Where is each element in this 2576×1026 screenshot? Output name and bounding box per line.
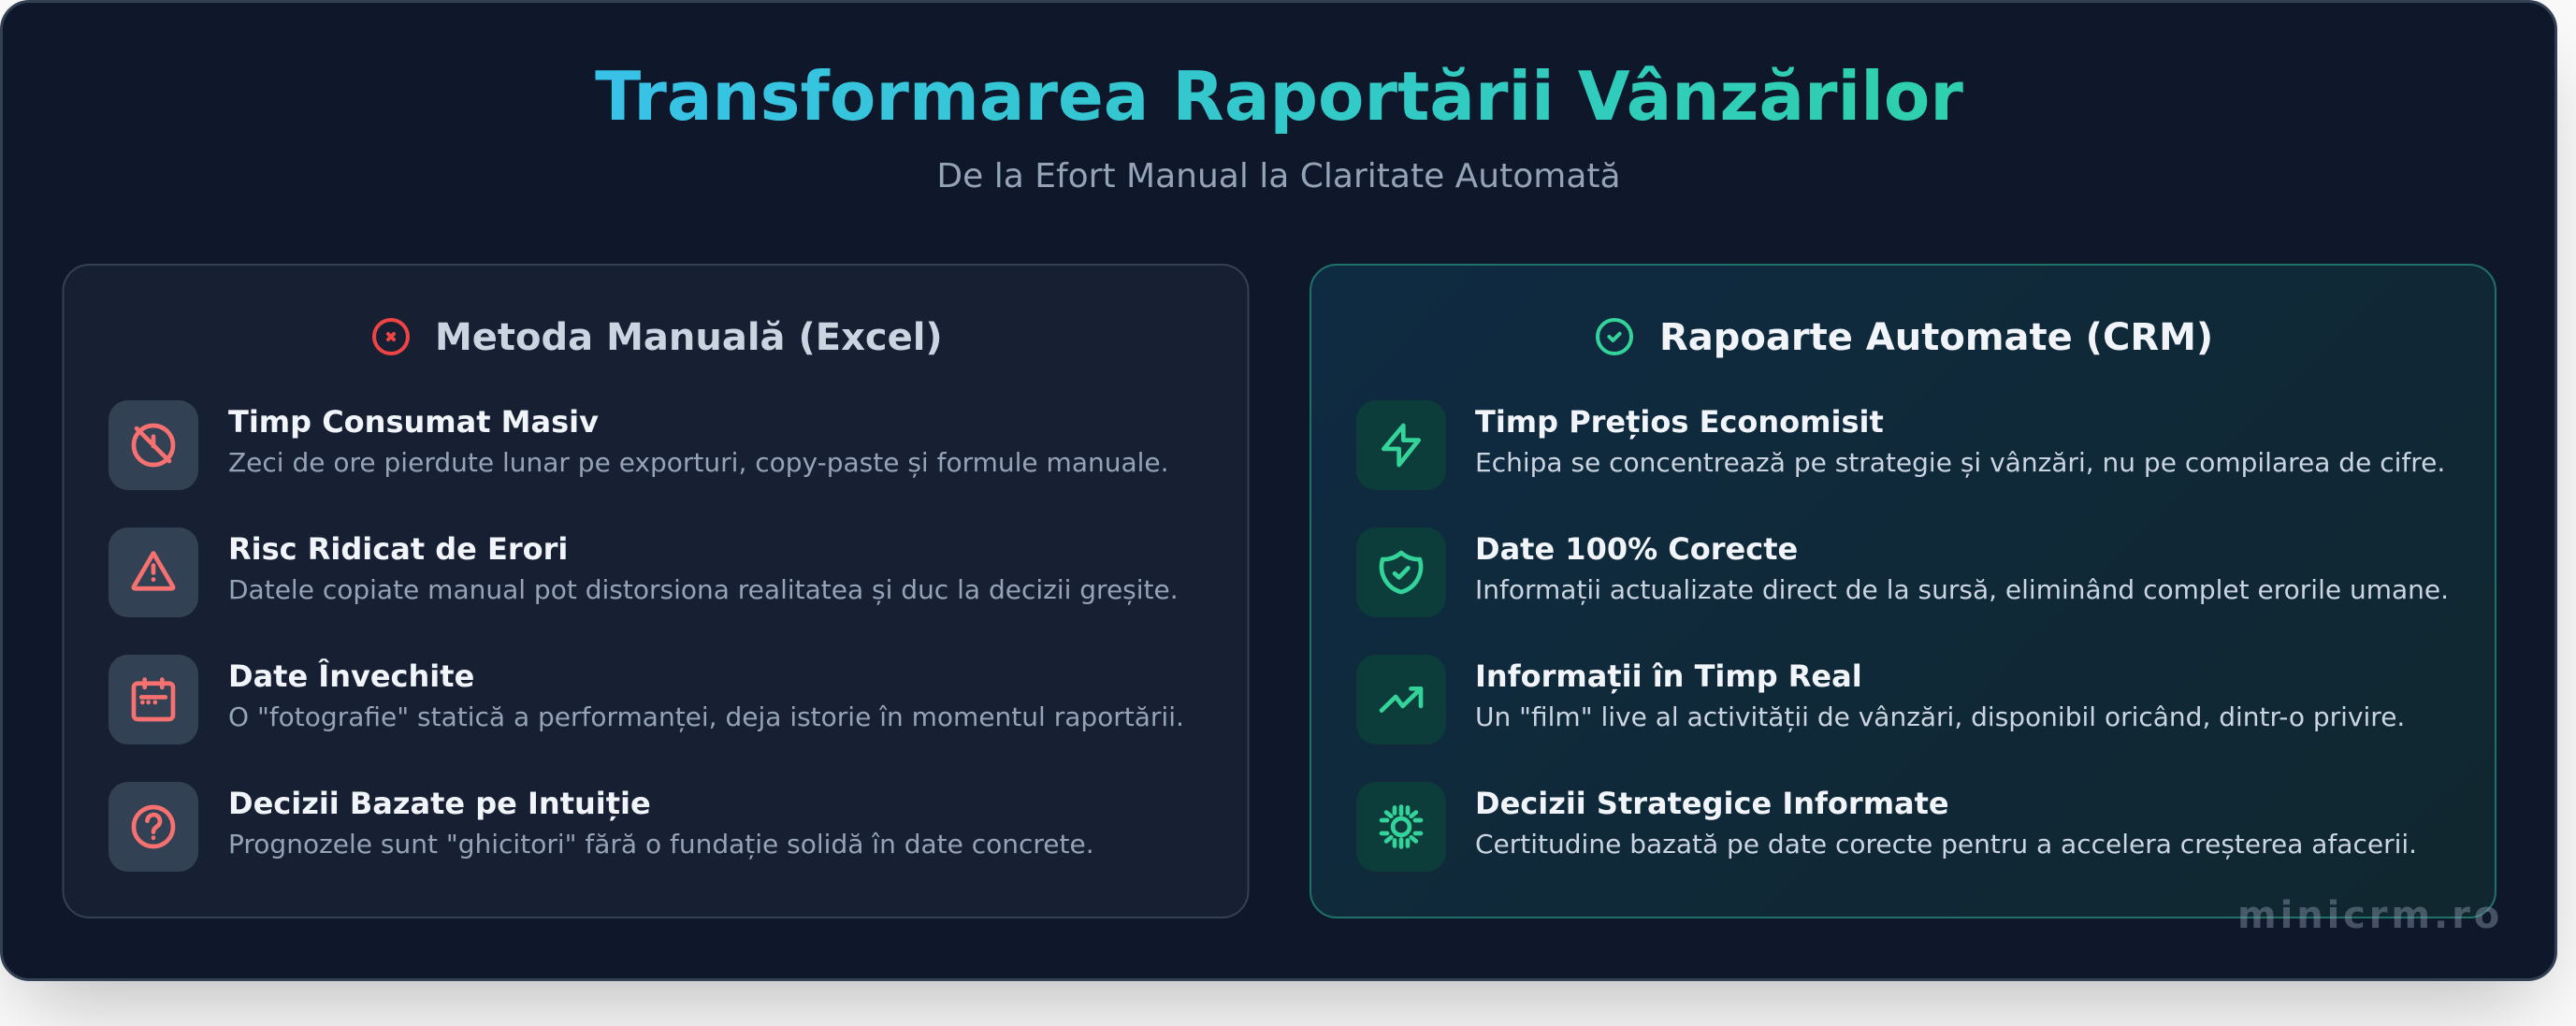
item text: Datele copiate manual pot distorsiona realitatea și duc la decizii greșite. (228, 574, 1179, 605)
panel heading (1598, 316, 2213, 359)
item text: Un "film" live al activității de vânzări, disponibil oricând, dintr-o privire. (1475, 701, 2405, 732)
item text: Echipa se concentrează pe strategie și vânzări, nu pe compilarea de cifre. (1475, 447, 2445, 478)
item: errors (109, 527, 1179, 617)
icon: sun (1382, 807, 1421, 846)
panel: manual method (64, 265, 1248, 918)
icon: calendar (134, 680, 173, 719)
item title: Risc Ridicat de Erori (228, 531, 568, 567)
item title: Informații în Timp Real (1475, 658, 1862, 694)
item text: Certitudine bazată pe date corecte pentru a accelera creșterea afacerii. (1475, 829, 2417, 860)
item title: Timp Prețios Economisit (1475, 404, 1884, 440)
icon box (109, 400, 198, 490)
icon: clock off (134, 426, 173, 465)
icon box (1356, 655, 1446, 744)
item: intuition (109, 782, 1094, 872)
item text: Informații actualizate direct de la sursă, eliminând complet erorile umane. (1475, 574, 2449, 605)
icon: check circle (1598, 320, 1631, 354)
item: real time (1356, 655, 2405, 744)
icon: trending up (1382, 688, 1421, 711)
item: strategic decisions (1356, 782, 2417, 872)
icon: shield check (1382, 553, 1421, 592)
icon box (1356, 527, 1446, 617)
title: Transformarea Raportării Vânzărilor (595, 57, 1963, 136)
panel background (1310, 265, 2496, 918)
icon box (109, 782, 198, 872)
item: correct data (1356, 527, 2449, 617)
item text: Prognozele sunt "ghicitori" fără o fundație solidă în date concrete. (228, 829, 1094, 860)
heading text: Rapoarte Automate (CRM) (1659, 316, 2213, 359)
icon box (109, 655, 198, 744)
heading text: Metoda Manuală (Excel) (435, 316, 943, 359)
item: outdated data (109, 655, 1184, 744)
icon: question (134, 807, 173, 846)
item: time (109, 400, 1169, 490)
icon: bolt (1383, 426, 1419, 465)
item text: Zeci de ore pierdute lunar pe exporturi, copy-paste și formule manuale. (228, 447, 1169, 478)
icon box (1356, 782, 1446, 872)
panel background (64, 265, 1248, 918)
item title: Date 100% Corecte (1475, 531, 1798, 567)
subtitle: De la Efort Manual la Claritate Automată (936, 157, 1621, 195)
icon: warning triangle (134, 553, 173, 588)
icon box (1356, 400, 1446, 490)
icon: x circle (374, 320, 408, 354)
panel heading (374, 316, 943, 359)
watermark: minicrm.ro (2237, 894, 2503, 937)
panel: automatic reports (1310, 265, 2496, 918)
icon box (109, 527, 198, 617)
item: time saved (1356, 400, 2445, 490)
item title: Timp Consumat Masiv (228, 404, 599, 440)
item title: Decizii Bazate pe Intuiție (228, 786, 651, 821)
item title: Decizii Strategice Informate (1475, 786, 1949, 821)
item title: Date Învechite (228, 658, 474, 694)
item text: O "fotografie" statică a performanței, deja istorie în momentul raportării. (228, 701, 1184, 732)
